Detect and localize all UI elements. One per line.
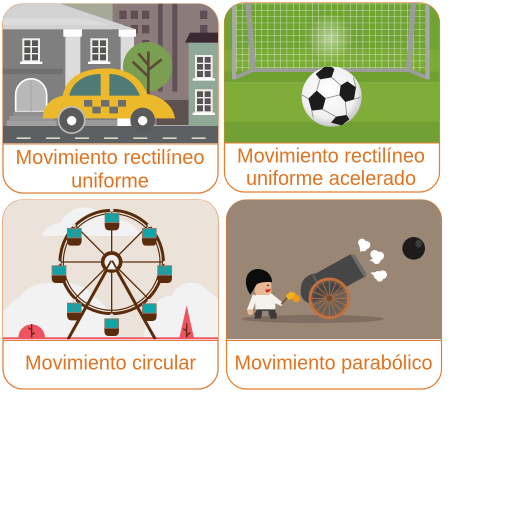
illustration: cannon and soldier: [226, 200, 441, 339]
separator line 2: [224, 142, 440, 144]
card outline 4: [226, 200, 442, 389]
illustration: ferris wheel: [3, 200, 218, 340]
separator line 3: [3, 340, 218, 342]
separator line 1: [3, 143, 218, 145]
label 4: Movimiento parabólico: [234, 352, 432, 374]
card: movimiento rectilíneo uniforme: [3, 4, 218, 193]
separator line 4: [226, 340, 441, 342]
card outline 2: [224, 3, 440, 192]
card: movimiento rectilíneo uniforme acelerado: [224, 3, 440, 192]
card: movimiento circular: [3, 200, 218, 389]
label 2 second line: uniforme acelerado: [246, 168, 416, 190]
illustration: soccer ball and goal: [224, 3, 439, 143]
card outline 1: [3, 4, 218, 193]
label 1: Movimiento rectilíneo: [16, 147, 204, 169]
label 2: Movimiento rectilíneo: [237, 146, 425, 168]
label 1 second line: uniforme: [71, 170, 149, 192]
label 3: Movimiento circular: [25, 352, 196, 374]
smoke puffs: [358, 239, 387, 282]
card: movimiento parabólico: [226, 200, 442, 389]
illustration: taxi in the city: [3, 4, 218, 143]
card outline 3: [3, 200, 218, 389]
